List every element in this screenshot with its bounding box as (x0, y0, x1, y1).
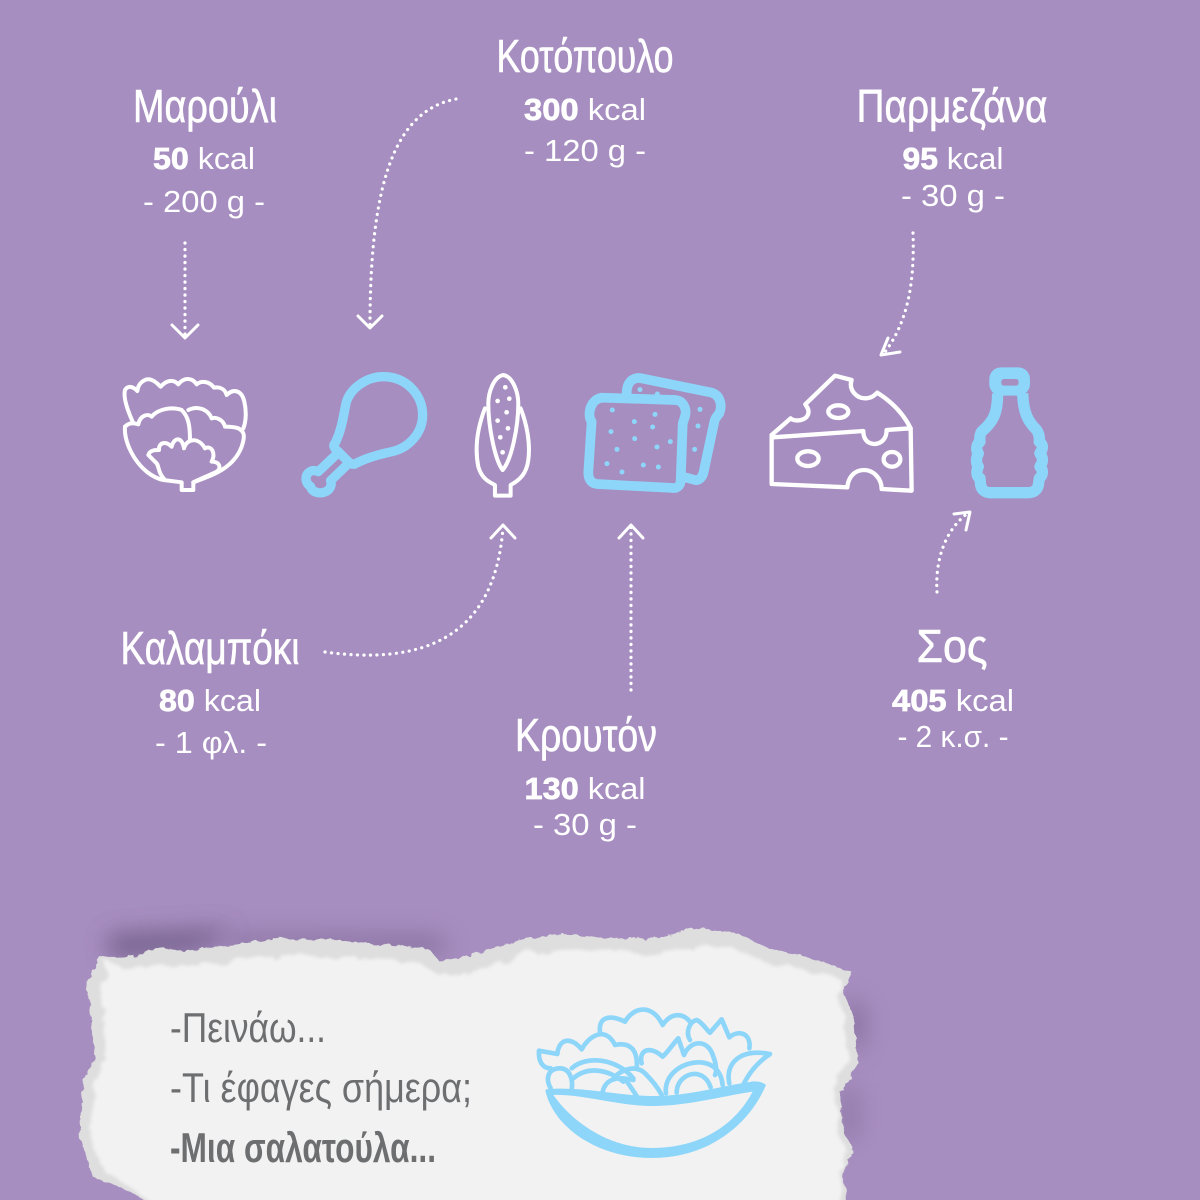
label: corn: 80 kcal (159, 683, 261, 718)
arrow: croutons (619, 525, 643, 690)
icon: corn (477, 375, 529, 496)
label: sauce: Σος (916, 620, 988, 672)
label: croutons (515, 709, 657, 842)
label: corn: - 1 φλ. - (155, 725, 267, 760)
panel: torn paper note (80, 928, 866, 1200)
label: parmesan: Παρμεζάνα (856, 80, 1048, 132)
arrow: lettuce (172, 243, 198, 338)
note text: -Τι έφαγες σήμερα; (170, 1064, 472, 1111)
label: lettuce: - 200 g - (143, 184, 265, 219)
label: chicken: - 120 g - (524, 133, 646, 168)
label: parmesan: 95 kcal (902, 141, 1004, 176)
label: parmesan (856, 80, 1048, 213)
note text (170, 1004, 472, 1171)
label: lettuce (133, 80, 277, 219)
icon: salad bowl (539, 1010, 770, 1158)
label: croutons: 130 kcal (524, 771, 646, 806)
label: corn: Καλαμπόκι (120, 622, 300, 674)
arrow: corn (325, 525, 515, 655)
icon: lettuce (125, 379, 246, 490)
label: sauce: 405 kcal (892, 683, 1014, 718)
label: lettuce: Μαρούλι (133, 80, 277, 132)
label: chicken: 300 kcal (524, 92, 646, 127)
label: parmesan: - 30 g - (901, 178, 1005, 213)
icon: bread slices (588, 378, 721, 488)
label: croutons: - 30 g - (533, 807, 637, 842)
label: chicken (496, 30, 674, 168)
note text: -Πεινάω... (170, 1004, 326, 1051)
label: croutons: Κρουτόν (515, 709, 657, 761)
arrow: parmesan (881, 233, 913, 355)
label: lettuce: 50 kcal (153, 141, 255, 176)
icon: sauce bottle (977, 367, 1042, 493)
icon: cheese (772, 376, 912, 491)
note text: -Μια σαλατούλα... (170, 1124, 436, 1171)
label: sauce: - 2 κ.σ. - (898, 719, 1008, 754)
label: corn (120, 622, 300, 760)
icon: chicken drumstick (306, 377, 423, 493)
arrow: chicken (358, 99, 456, 328)
label: chicken: Κοτόπουλο (496, 30, 674, 82)
label: sauce (892, 620, 1014, 754)
arrow: sauce (937, 512, 970, 592)
